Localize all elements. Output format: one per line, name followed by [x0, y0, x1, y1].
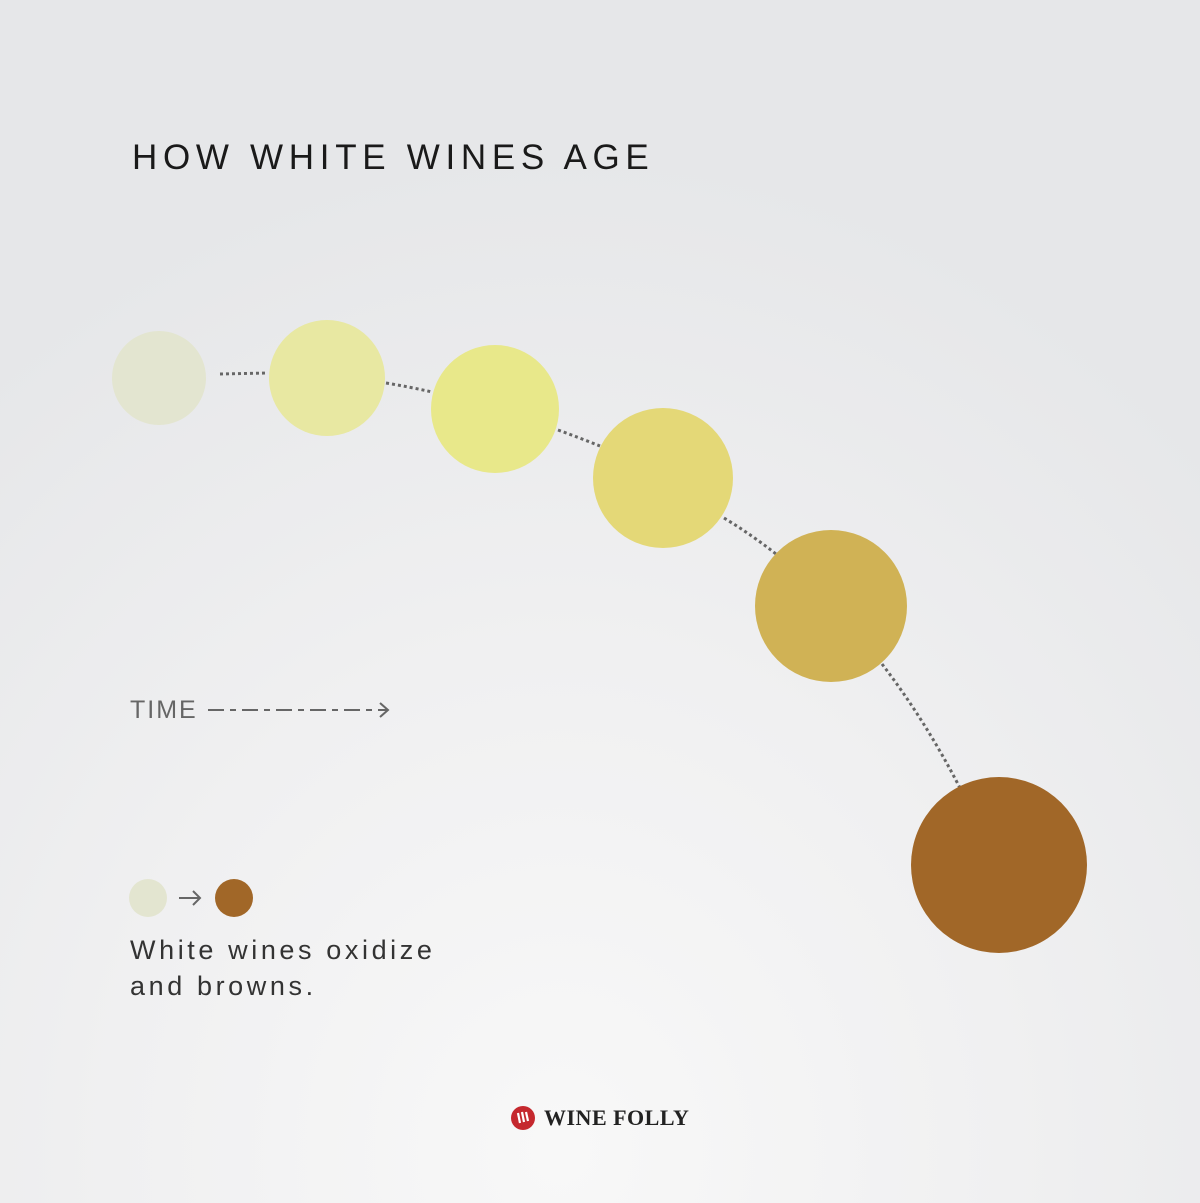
circle 1 [112, 331, 206, 425]
title: HOW WHITE WINES AGE [132, 138, 654, 177]
legend text: White wines oxidize [130, 935, 436, 965]
time label with arrow: TIME [130, 696, 198, 724]
legend text: and browns. [130, 971, 317, 1001]
circle 3 [431, 345, 559, 473]
logo: WINE FOLLY [544, 1105, 689, 1130]
legend: color change [129, 879, 253, 917]
time label with arrow [130, 696, 390, 724]
circle 5 [755, 530, 907, 682]
circle 2 [269, 320, 385, 436]
legend text [130, 935, 436, 1001]
circle 6 [911, 777, 1087, 953]
circle 4 [593, 408, 733, 548]
dotted connectors [220, 373, 960, 788]
